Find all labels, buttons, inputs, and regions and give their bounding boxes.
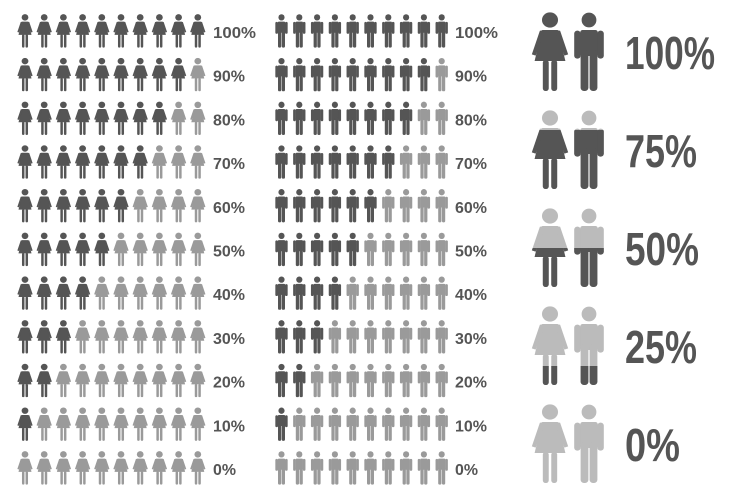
text: women percentage labels: 70% — [213, 156, 245, 173]
text: men percentage labels: 10% — [455, 418, 487, 435]
text: women percentage labels: 50% — [213, 244, 245, 260]
panel: large couple icons — [532, 12, 604, 483]
text: women percentage labels: 10% — [213, 418, 245, 435]
text: men percentage labels: 50% — [455, 244, 487, 260]
text: large percentage labels: 25% — [625, 321, 697, 373]
text: women percentage labels: 40% — [213, 287, 245, 304]
text: men percentage labels: 20% — [455, 375, 487, 392]
text: large percentage labels: 50% — [625, 223, 699, 275]
text: women percentage labels: 100% — [213, 25, 256, 42]
text: men percentage labels: 30% — [455, 331, 487, 348]
text: men percentage labels: 100% — [455, 25, 498, 42]
text: men percentage labels: 40% — [455, 287, 487, 304]
text: large percentage labels — [625, 27, 715, 471]
text: men percentage labels: 90% — [455, 69, 487, 86]
text: women percentage labels — [213, 25, 256, 479]
panel: women rows — [17, 14, 205, 485]
text: men percentage labels: 80% — [455, 112, 487, 129]
text: men percentage labels: 70% — [455, 156, 487, 173]
text: large percentage labels: 0% — [625, 419, 680, 471]
text: men percentage labels: 0% — [455, 462, 478, 479]
text: men percentage labels — [455, 25, 498, 479]
text: large percentage labels: 75% — [625, 125, 697, 177]
panel: men rows — [275, 14, 448, 485]
text: women percentage labels: 60% — [213, 200, 245, 217]
text: women percentage labels: 20% — [213, 375, 245, 392]
text: men percentage labels: 60% — [455, 200, 487, 217]
text: women percentage labels: 0% — [213, 462, 236, 479]
text: women percentage labels: 30% — [213, 331, 245, 348]
text: women percentage labels: 90% — [213, 69, 245, 86]
text: women percentage labels: 80% — [213, 112, 245, 129]
